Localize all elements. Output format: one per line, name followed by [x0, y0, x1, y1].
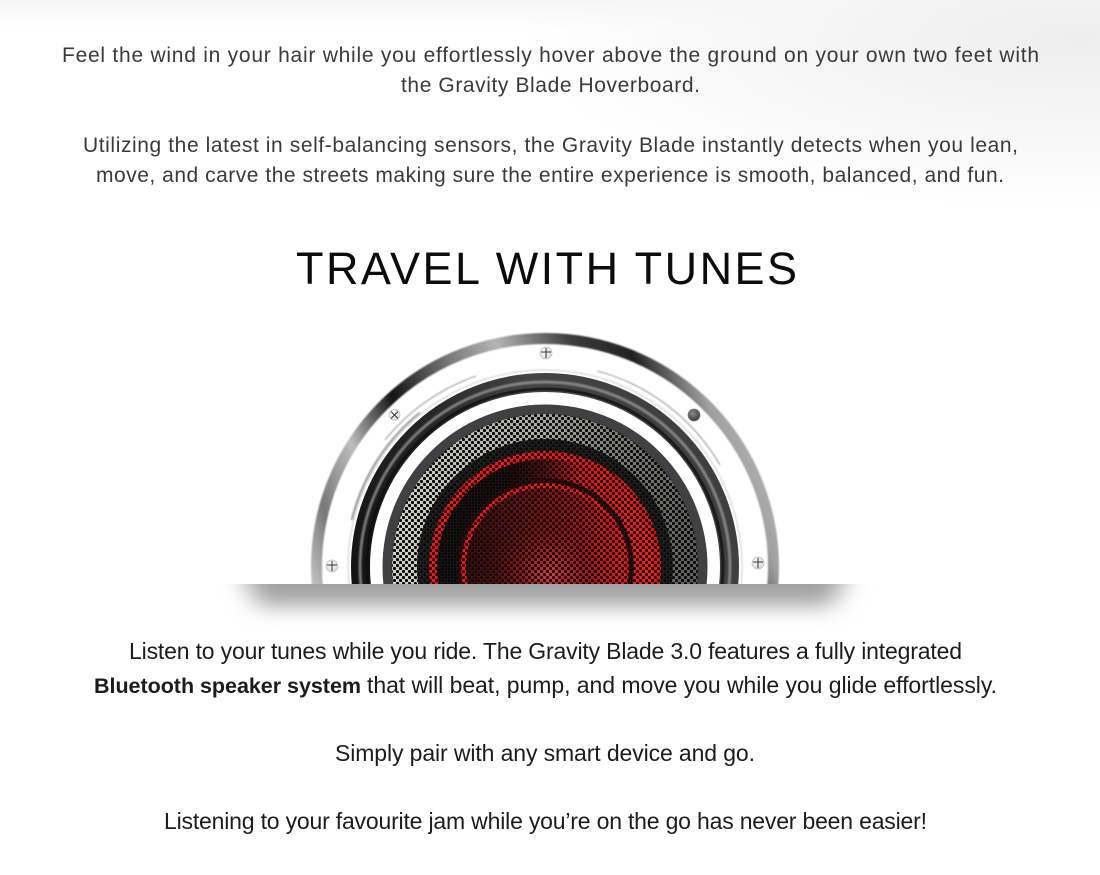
- screw: upper right: [688, 409, 700, 421]
- title: TRAVEL WITH TUNES: [296, 243, 797, 294]
- inner dark gasket: [382, 404, 708, 584]
- speaker illustration: [310, 332, 780, 584]
- intro text: the Gravity Blade Hoverboard.: [401, 74, 700, 97]
- intro text: [62, 44, 1039, 187]
- outer chrome rim: [310, 332, 780, 584]
- body text: [94, 638, 997, 834]
- screw: lower left: [326, 560, 338, 572]
- speaker grille: [392, 414, 698, 584]
- dark surround band: [351, 373, 739, 584]
- intro text: Utilizing the latest in self-balancing sensors, the Gravity Blade instantly detects when you lean,: [83, 134, 1018, 157]
- thin bezel highlights: [346, 368, 744, 584]
- screw: top: [540, 347, 552, 359]
- screw: lower right: [752, 557, 764, 569]
- white inner ring: [376, 398, 714, 736]
- screw: upper left: [389, 410, 400, 420]
- body text: Listen to your tunes while you ride. The Gravity Blade 3.0 features a fully integrated: [129, 638, 962, 664]
- white bezel: [316, 338, 774, 796]
- body text: Bluetooth speaker system: [94, 674, 361, 698]
- intro text: move, and carve the streets making sure the entire experience is smooth, balanced, and fun.: [96, 164, 1004, 187]
- body text: Simply pair with any smart device and go.: [335, 740, 755, 766]
- body text: that will beat, pump, and move you while you glide effortlessly.: [367, 672, 997, 698]
- intro text: Feel the wind in your hair while you effortlessly hover above the ground on your own two feet with: [62, 44, 1039, 67]
- body text: Listening to your favourite jam while you’re on the go has never been easier!: [164, 808, 927, 834]
- speaker shadow: [230, 584, 860, 619]
